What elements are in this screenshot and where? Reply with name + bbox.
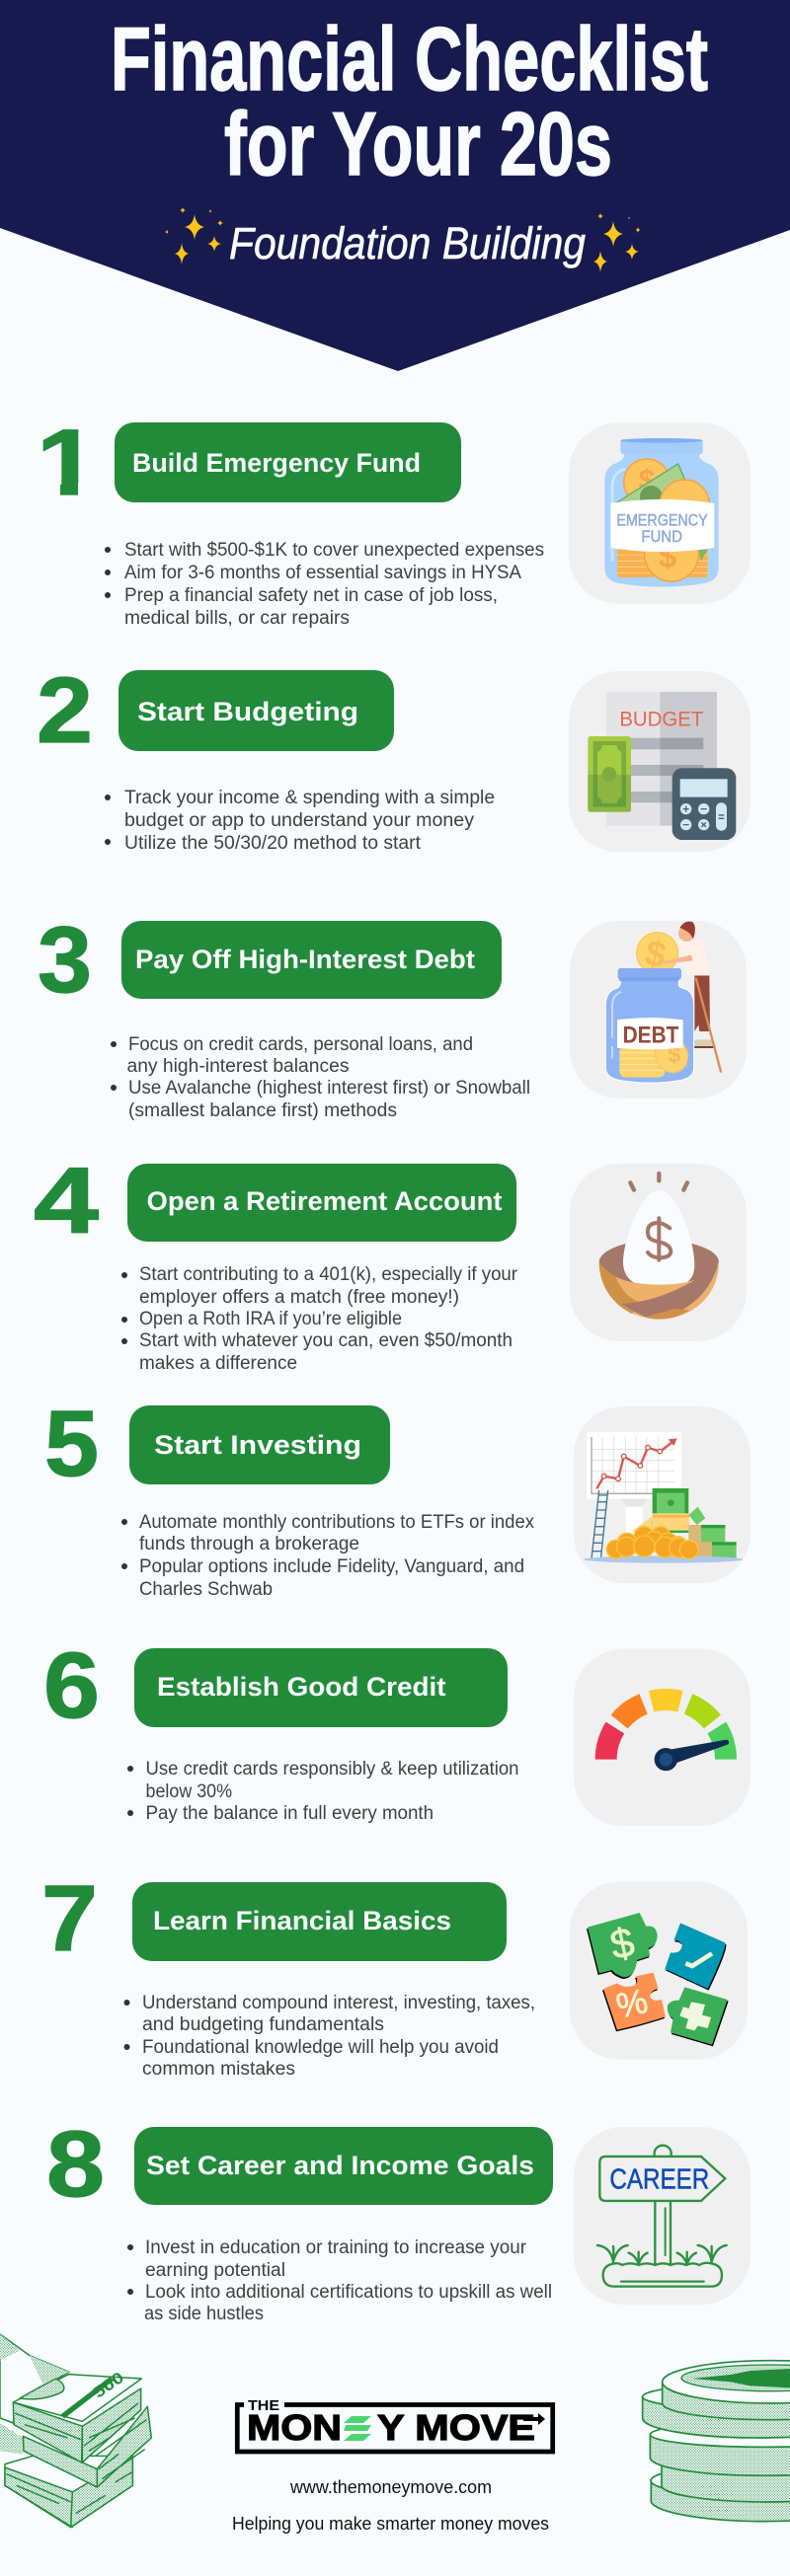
bullet list: below 30% bbox=[146, 1781, 232, 1802]
illustration: stack of coins bbox=[643, 2361, 790, 2522]
icon: credit score gauge bbox=[574, 1649, 750, 1826]
icon: emergency fund jar: $ bbox=[659, 539, 677, 575]
icon: career signpost: CAREER bbox=[609, 2163, 709, 2195]
bullet list: Aim for 3-6 months of essential savings in HYSA bbox=[124, 563, 521, 583]
icon: emergency fund jar: EMERGENCY bbox=[616, 510, 708, 529]
heading: pay off high-interest debt bbox=[121, 921, 502, 999]
heading: start investing bbox=[129, 1405, 390, 1484]
icon: career signpost bbox=[574, 2127, 750, 2305]
number 7: 7 bbox=[41, 1866, 98, 1971]
bullet list: (smallest balance first) methods bbox=[128, 1100, 397, 1121]
icon: budget sheet, cash and calculator: BUDGET bbox=[619, 709, 703, 731]
icon: emergency fund jar: FUND bbox=[641, 527, 682, 546]
heading: learn financial basics: Learn Financial Basics bbox=[153, 1906, 451, 1935]
bullet list: Track your income & spending with a simple bbox=[124, 788, 495, 808]
heading: build emergency fund: Build Emergency Fund bbox=[132, 448, 421, 478]
subtitle: Foundation Building bbox=[229, 218, 586, 268]
logo: the money move: Y MOVE bbox=[377, 2407, 535, 2448]
bullet list: makes a difference bbox=[139, 1353, 297, 1374]
icon: puzzle pieces: % bbox=[613, 1982, 651, 2025]
bullet list: employer offers a match (free money!) bbox=[139, 1287, 459, 1308]
panel: step 7 bbox=[41, 1866, 748, 2080]
heading: establish good credit: Establish Good Credit bbox=[157, 1672, 446, 1702]
heading: set career and income goals bbox=[134, 2127, 553, 2205]
icon: puzzle pieces bbox=[570, 1882, 748, 2060]
heading: set career and income goals: Set Career and Income Goals bbox=[146, 2151, 534, 2180]
bullet list: Open a Roth IRA if you’re eligible bbox=[139, 1309, 402, 1329]
bullet list: Foundational knowledge will help you avoid bbox=[142, 2037, 499, 2058]
illustration: stacks of cash: 500 bbox=[91, 2369, 127, 2402]
panel: step 3 bbox=[38, 908, 747, 1121]
number 5: 5 bbox=[44, 1392, 99, 1496]
heading: start budgeting: Start Budgeting bbox=[137, 697, 358, 726]
number 1: 1 bbox=[37, 411, 99, 515]
panel: step 8 bbox=[46, 2112, 750, 2324]
icon: debt jar with man and coin: $ bbox=[668, 1042, 680, 1068]
bullet list: Utilize the 50/30/20 method to start bbox=[124, 833, 422, 854]
panel: step 1 bbox=[36, 411, 750, 629]
heading: pay off high-interest debt: Pay Off High-Interest Debt bbox=[135, 945, 475, 974]
bullet list bbox=[124, 1993, 535, 2080]
bullet list: Look into additional certifications to upskill as well bbox=[145, 2282, 552, 2303]
icon: emergency fund jar bbox=[569, 422, 750, 604]
icon: growth chart with coins and cash bbox=[574, 1406, 750, 1583]
bullet list: Pay the balance in full every month bbox=[146, 1803, 434, 1824]
heading: build emergency fund bbox=[115, 422, 461, 502]
number 2: 2 bbox=[37, 658, 93, 763]
panel: step 4 bbox=[34, 1149, 747, 1374]
bullet list bbox=[105, 540, 544, 629]
bullet list: any high-interest balances bbox=[126, 1056, 350, 1077]
bullet list: budget or app to understand your money bbox=[124, 810, 475, 831]
panel: step 6 bbox=[43, 1633, 750, 1826]
icon: debt jar with man and coin: $ bbox=[642, 932, 670, 976]
logo: the money move: THE bbox=[248, 2397, 279, 2414]
bullet list: as side hustles bbox=[144, 2304, 264, 2324]
bullet list bbox=[111, 1034, 530, 1121]
number 4: 4 bbox=[34, 1149, 99, 1253]
icon: puzzle pieces: $ bbox=[606, 1918, 638, 1968]
logo: the money move bbox=[237, 2397, 553, 2452]
icon: debt jar with man and coin bbox=[570, 921, 747, 1099]
icon: emergency fund jar: $ bbox=[639, 465, 656, 497]
bullet list bbox=[105, 788, 495, 854]
bullet list: Use Avalanche (highest interest first) or Snowball bbox=[128, 1078, 530, 1099]
bullet list: earning potential bbox=[145, 2260, 285, 2281]
bullet list: Start with whatever you can, even $50/month bbox=[139, 1330, 513, 1351]
bullet list: Prep a financial safety net in case of job loss, bbox=[124, 585, 498, 606]
number 8: 8 bbox=[46, 2112, 105, 2217]
bullet list: Charles Schwab bbox=[139, 1579, 273, 1600]
title bbox=[111, 10, 708, 194]
header banner bbox=[0, 0, 790, 371]
logo: the money move: MON bbox=[247, 2407, 342, 2448]
bullet list: common mistakes bbox=[142, 2059, 295, 2080]
heading: start budgeting bbox=[118, 670, 394, 751]
bullet list: Focus on credit cards, personal loans, and bbox=[128, 1034, 473, 1055]
bullet list: medical bills, or car repairs bbox=[124, 608, 350, 629]
bullet list bbox=[127, 2237, 552, 2324]
bullet list: funds through a brokerage bbox=[139, 1534, 359, 1554]
icon: right sparkles bbox=[593, 213, 640, 272]
bullet list bbox=[121, 1264, 518, 1374]
panel: step 5 bbox=[44, 1392, 750, 1600]
icon: nest egg bbox=[570, 1164, 747, 1341]
title: for Your 20s bbox=[224, 95, 612, 194]
bullet list bbox=[121, 1512, 534, 1600]
bullet list: Automate monthly contributions to ETFs or index bbox=[139, 1512, 534, 1533]
bullet list: Invest in education or training to increase your bbox=[145, 2237, 527, 2258]
number 6: 6 bbox=[43, 1633, 100, 1738]
icon: debt jar with man and coin: DEBT bbox=[623, 1023, 679, 1049]
heading: open a retirement account bbox=[127, 1164, 516, 1242]
bullet list: Use credit cards responsibly & keep utilization bbox=[146, 1759, 519, 1780]
illustration: stacks of cash bbox=[0, 2334, 151, 2528]
number 3: 3 bbox=[38, 908, 92, 1013]
bullet list bbox=[127, 1759, 519, 1824]
icon: budget sheet, cash and calculator bbox=[569, 671, 750, 852]
footer tagline: Helping you make smarter money moves bbox=[232, 2514, 549, 2534]
bullet list: Understand compound interest, investing, taxes, bbox=[142, 1993, 535, 2013]
bullet list: Start contributing to a 401(k), especially if your bbox=[139, 1264, 518, 1285]
heading: start investing: Start Investing bbox=[154, 1430, 361, 1460]
bullet list: Start with $500-$1K to cover unexpected expenses bbox=[124, 540, 544, 561]
heading: open a retirement account: Open a Retirement Account bbox=[146, 1186, 503, 1216]
bullet list: and budgeting fundamentals bbox=[142, 2014, 384, 2035]
bullet list: Popular options include Fidelity, Vanguard, and bbox=[139, 1556, 524, 1577]
panel: step 2 bbox=[37, 658, 750, 854]
heading: establish good credit bbox=[134, 1648, 508, 1727]
heading: learn financial basics bbox=[132, 1882, 507, 1961]
footer website: www.themoneymove.com bbox=[289, 2477, 492, 2497]
icon: left sparkles bbox=[165, 207, 223, 265]
